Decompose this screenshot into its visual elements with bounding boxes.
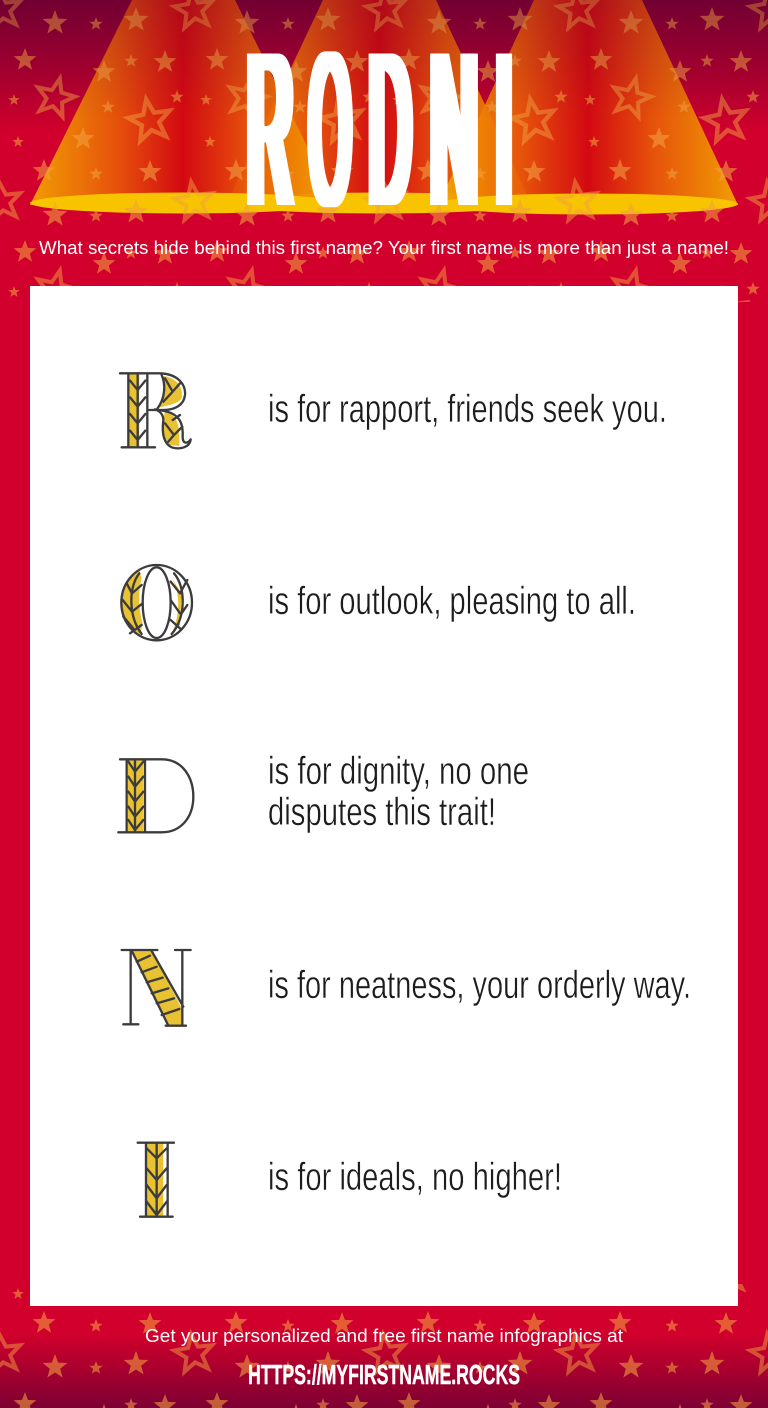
footer: call to action: Get your personalized and free first name infographics at (145, 1326, 623, 1346)
title: RODNI: I (496, 6, 511, 252)
footer: website url: HTTPS://MYFIRSTNAME.ROCKS (248, 1359, 520, 1390)
icon: decorated letter D (118, 759, 193, 832)
row: letter D (118, 750, 529, 834)
text: O line: is for outlook, pleasing to all. (268, 580, 636, 623)
title: RODNI (246, 6, 512, 252)
spotlight: middle (226, 0, 532, 214)
panel: white content card (30, 286, 738, 1306)
title: RODNI: R (248, 6, 292, 252)
text: D lines: is for dignity, no one (268, 750, 529, 793)
icon: decorated letter O (121, 565, 192, 640)
row: letter N (122, 950, 691, 1026)
icon: decorated letter N (122, 950, 191, 1026)
row: letter O (121, 565, 636, 640)
text: D lines: disputes this trait! (268, 791, 496, 834)
text: D lines (268, 750, 529, 834)
icon: decorated letter R (120, 373, 191, 448)
subtitle: What secrets hide behind this first name? Your first name is more than just a name! (39, 238, 729, 258)
spotlight: right (438, 0, 738, 214)
title: RODNI: N (431, 6, 477, 252)
icon: decorated letter I (138, 1143, 174, 1217)
row: letter R (120, 373, 667, 448)
spotlight: left (30, 0, 336, 214)
row: letter I (138, 1143, 562, 1217)
text: I line: is for ideals, no higher! (268, 1156, 562, 1199)
title: RODNI: O (309, 6, 351, 252)
title: RODNI: D (369, 6, 411, 252)
